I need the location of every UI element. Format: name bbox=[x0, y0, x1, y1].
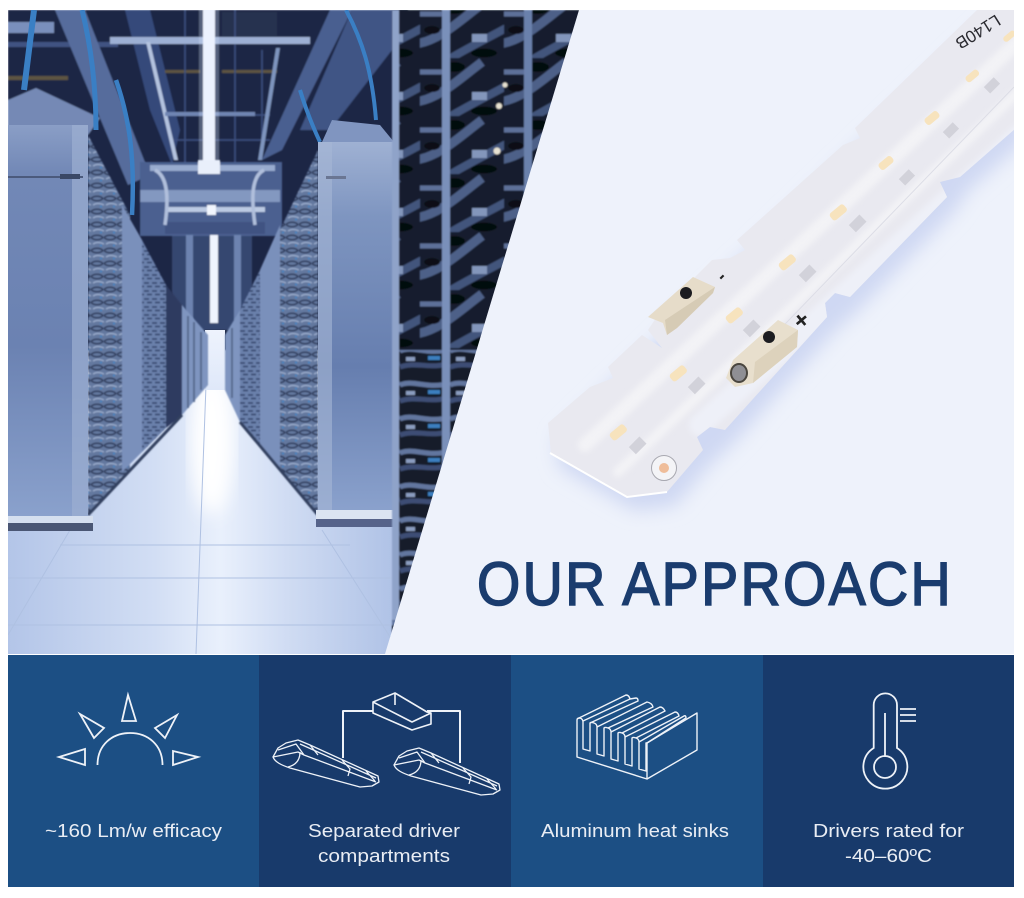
LED module board bbox=[548, 10, 1024, 511]
panel: driver temperature bbox=[763, 655, 1014, 887]
label: temperature rating: Drivers rated for bbox=[813, 820, 964, 841]
title: OUR APPROACH bbox=[477, 550, 953, 618]
plus connector bbox=[726, 320, 798, 387]
polarity marks bbox=[720, 274, 807, 326]
polarity marks: - bbox=[712, 267, 730, 285]
label: temperature rating bbox=[813, 820, 964, 866]
solder pad bbox=[652, 456, 676, 480]
label: temperature rating: -40–60ºC bbox=[845, 845, 932, 866]
panel: driver compartments bbox=[259, 655, 511, 887]
overhead cross structure bbox=[140, 160, 282, 330]
board shadow bbox=[552, 130, 1014, 515]
floor bbox=[8, 365, 395, 654]
icon: thermometer bbox=[863, 693, 916, 789]
icon: driver box and luminaires bbox=[273, 693, 500, 795]
blue cables bbox=[24, 10, 376, 215]
board marking text: L140B bbox=[952, 11, 1004, 53]
board light channels bbox=[585, 40, 1020, 472]
label: driver compartments: compartments bbox=[318, 845, 450, 866]
left front cabinet bbox=[8, 125, 93, 531]
LED chips bbox=[609, 29, 1017, 442]
photo: data center aisle bbox=[8, 10, 582, 660]
polarity marks: + bbox=[788, 306, 816, 335]
icon: heat sink bbox=[577, 695, 697, 779]
panel: efficacy bbox=[8, 655, 259, 887]
left server rack row bbox=[88, 135, 208, 515]
grey resistor marks bbox=[629, 77, 1000, 454]
label: heat sinks: Aluminum heat sinks bbox=[541, 820, 729, 841]
right front cabinet bbox=[316, 120, 394, 527]
far end of aisle bbox=[205, 330, 225, 390]
cable-filled rack at right of photo bbox=[392, 10, 582, 660]
board ridge lines bbox=[785, 87, 1014, 324]
label: driver compartments bbox=[308, 820, 460, 866]
light background panel bbox=[8, 10, 1014, 654]
label: driver compartments: Separated driver bbox=[308, 820, 460, 841]
ceiling bbox=[8, 10, 408, 350]
right server rack row bbox=[225, 150, 318, 515]
board body bbox=[548, 10, 1016, 497]
icon: sun bbox=[59, 695, 198, 765]
panel: heat sinks bbox=[511, 655, 763, 887]
label: efficacy: ~160 Lm/w efficacy bbox=[45, 820, 223, 841]
minus connector bbox=[648, 277, 715, 335]
bevelled board end bbox=[550, 453, 667, 497]
